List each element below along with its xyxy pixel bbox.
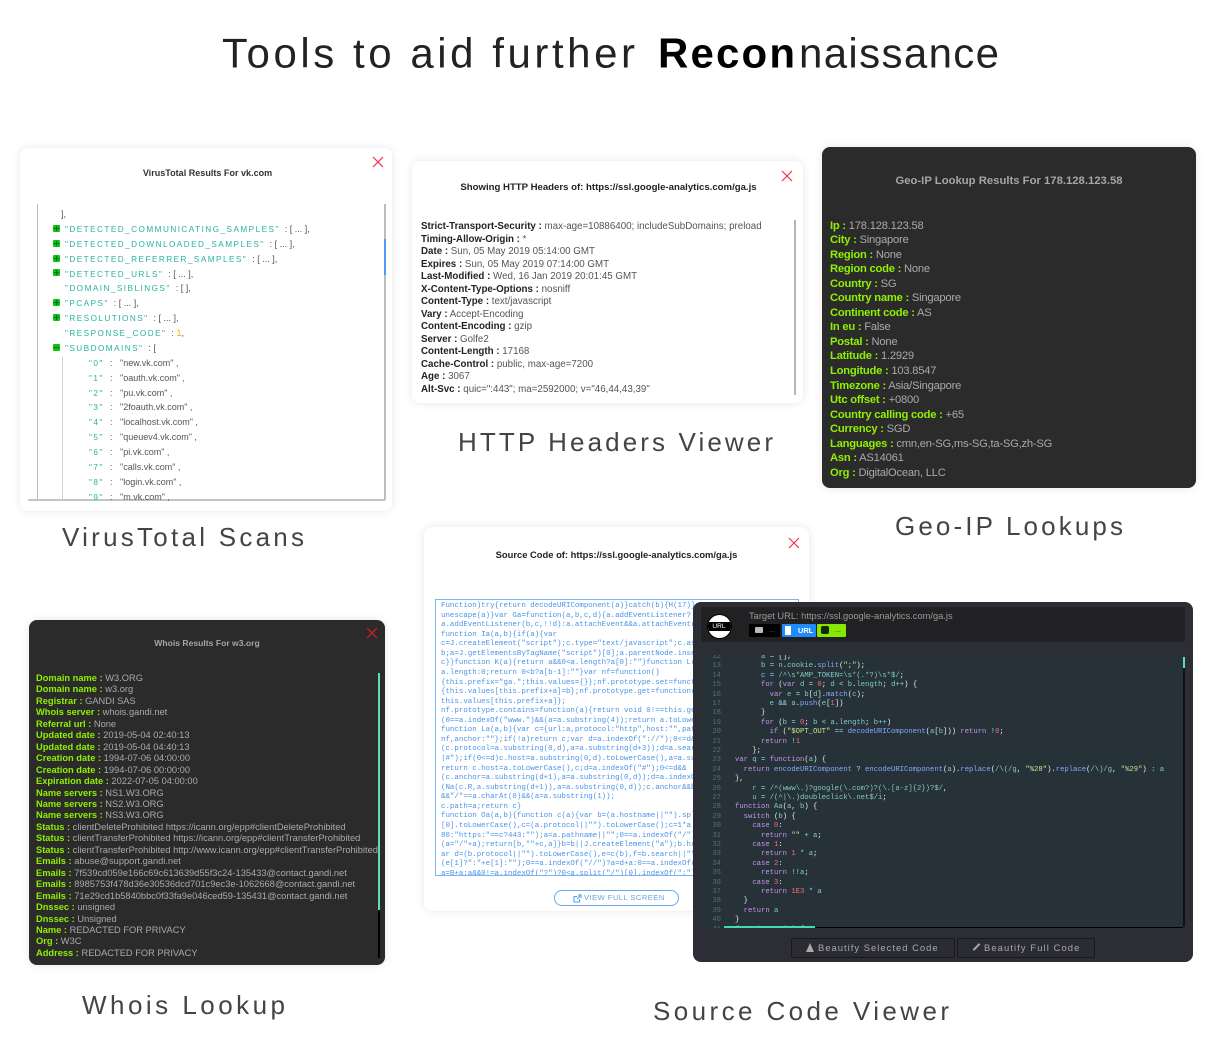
tag: URL: URL	[798, 626, 813, 635]
JSON tree viewer: "0"	[89, 359, 104, 368]
lookup fields: Languages : cmn,en-SG,ms-SG,ta-SG,zh-SG	[830, 438, 1052, 450]
JSON tree viewer: "DOMAIN_SIBLINGS" : [ ],	[65, 283, 191, 293]
JSON tree viewer: "5"	[89, 433, 104, 442]
title	[222, 30, 999, 76]
JSON tree viewer: "DETECTED_DOWNLOADED_SAMPLES" : [ ... ],	[65, 239, 295, 249]
whois fields: Creation date : 1994-07-06 00:00:00	[36, 765, 190, 775]
whois fields: Name servers : NS3.W3.ORG	[36, 810, 164, 820]
JSON tree viewer: "4"	[89, 418, 104, 427]
header list: Content-Length : 17168	[421, 346, 529, 357]
whois fields: Emails : 71e29cd1b5840bbc0f33fa9e046ced59-135431@contact.gandi.net	[36, 891, 347, 901]
icon: close	[782, 170, 792, 182]
button: beautify full	[957, 938, 1095, 958]
heading: VirusTotal results: VirusTotal Results For vk.com	[143, 168, 272, 178]
tag: green: ...	[835, 627, 841, 634]
scrollbar	[378, 673, 380, 958]
title: Recon	[658, 30, 795, 76]
whois fields: Status : clientTransferProhibited https://icann.org/epp#clientTransferProhibited	[36, 833, 360, 843]
JSON tree viewer: "1"	[89, 374, 104, 383]
caption: HTTP Headers Viewer: HTTP Headers Viewer	[458, 427, 773, 457]
JSON tree viewer: "login.vk.com" ,	[120, 477, 181, 487]
caption: Whois Lookup: Whois Lookup	[82, 990, 285, 1020]
whois fields: Creation date : 1994-07-06 04:00:00	[36, 753, 190, 763]
icon: close	[372, 156, 384, 168]
JSON tree viewer: "pi.vk.com" ,	[120, 447, 169, 457]
JSON tree viewer: "new.vk.com" ,	[120, 358, 178, 368]
whois fields: Status : clientDeleteProhibited https://icann.org/epp#clientDeleteProhibited	[36, 822, 346, 832]
whois fields: Name servers : NS1.W3.ORG	[36, 788, 164, 798]
lookup fields: Country calling code : +65	[830, 409, 964, 421]
header list: Timing-Allow-Origin : *	[421, 234, 526, 244]
icon: close	[788, 538, 800, 548]
whois fields: Whois server : whois.gandi.net	[36, 707, 167, 717]
code pane: a = []; b = n.cookie.split(";"); c = /^\s*AMP_TOKEN=\s*(.*?)\s*$/; for (var d = 0; d < b.length; d++) { var e = b[d].match(c); e && a.push(e[1]) } for (b = 0; b < a.length; b++) if ("$OPT_OUT" == decodeURIComponent(a[b])) return !0; return !1 }; var q = function(a) { return encodeURIComponent ? encodeURIComponent(a).replace(/\(/g, "%28").replace(/\)/g, "%29") : a }, r = /^(www\.)?google(\.com?)?(\.[a-z]{2})?$/, u = /(^|\.)doubleclick\.net$/i; function Aa(a, b) { switch (b) { case 0: return "" + a; case 1: return 1 * a; case 2: return !!a; case 3: return 1E3 * a } return a } function Ca(a) {	[735, 655, 1164, 928]
header list: Alt-Svc : quic=":443"; ma=2592000; v="46,44,43,39"	[421, 384, 650, 394]
lookup fields: Timezone : Asia/Singapore	[830, 380, 961, 392]
whois fields: Registrar : GANDI SAS	[36, 696, 136, 706]
title: naissance	[799, 30, 999, 76]
JSON tree viewer: "7"	[89, 463, 104, 472]
JSON tree viewer: :	[110, 417, 113, 427]
lookup fields: City : Singapore	[830, 234, 909, 246]
JSON tree viewer	[28, 204, 386, 501]
panel: HTTP headers	[412, 161, 803, 403]
header list: Cache-Control : public, max-age=7200	[421, 358, 593, 370]
JSON tree viewer: "pu.vk.com" ,	[120, 388, 172, 398]
JSON tree viewer: :	[110, 462, 113, 472]
lookup fields: Continent code : AS	[830, 307, 932, 319]
JSON tree viewer: "PCAPS" : [ ... ],	[65, 298, 139, 308]
JSON tree viewer: :	[110, 477, 113, 487]
heading: HTTP headers: Showing HTTP Headers of: https://ssl.google-analytics.com/ga.js	[460, 182, 757, 193]
header list: Server : Golfe2	[421, 334, 489, 344]
lookup fields: Postal : None	[830, 336, 897, 348]
whois fields: Org : W3C	[36, 936, 81, 946]
header list: Last-Modified : Wed, 16 Jan 2019 20:01:45 GMT	[421, 271, 637, 282]
lookup fields: Asn : AS14061	[830, 452, 904, 464]
whois fields: Domain name : w3.org	[36, 684, 133, 694]
panel: Whois lookup	[29, 620, 385, 965]
header list	[421, 221, 762, 394]
JSON tree viewer: "2"	[89, 388, 104, 398]
JSON tree viewer: "localhost.vk.com" ,	[120, 417, 198, 427]
whois fields: Address : REDACTED FOR PRIVACY	[36, 948, 198, 958]
whois fields: Dnssec : unsigned	[36, 902, 115, 912]
header list: Date : Sun, 05 May 2019 05:14:00 GMT	[421, 246, 595, 257]
JSON tree viewer: "DETECTED_REFERRER_SAMPLES" : [ ... ],	[65, 254, 277, 264]
button: beautify selected	[791, 938, 955, 958]
JSON tree viewer: "8"	[89, 478, 104, 487]
header list: Strict-Transport-Security : max-age=10886400; includeSubDomains; preload	[421, 221, 762, 232]
JSON tree viewer: :	[110, 432, 113, 442]
whois fields	[36, 673, 378, 958]
lookup fields	[830, 220, 1052, 479]
JSON tree viewer: ],	[61, 209, 66, 219]
JSON tree viewer: "3"	[89, 403, 104, 412]
whois fields: Emails : abuse@support.gandi.net	[36, 856, 181, 866]
JSON tree viewer: "oauth.vk.com" ,	[120, 373, 185, 383]
JSON tree viewer: "DETECTED_URLS" : [ ... ],	[65, 268, 193, 278]
header list: Vary : Accept-Encoding	[421, 308, 523, 320]
header list: X-Content-Type-Options : nosniff	[421, 284, 570, 294]
whois fields: Name servers : NS2.W3.ORG	[36, 799, 164, 809]
icon: URL badge: URL	[712, 623, 726, 630]
heading: source code: Source Code of: https://ssl.google-analytics.com/ga.js	[496, 549, 737, 560]
header list: Expires : Sun, 05 May 2019 07:14:00 GMT	[421, 258, 609, 270]
lookup fields: Country name : Singapore	[830, 292, 961, 304]
lookup fields: Longitude : 103.8547	[830, 365, 936, 377]
whois fields: Name : REDACTED FOR PRIVACY	[36, 925, 186, 935]
toolbar	[701, 607, 1185, 642]
icon: close	[366, 628, 378, 638]
whois fields: Dnssec : Unsigned	[36, 914, 117, 924]
JSON tree viewer: "calls.vk.com" ,	[120, 462, 180, 472]
whois fields: Status : clientTransferProhibited http://www.icann.org/epp#clientTransferProhibited	[36, 845, 378, 855]
lookup fields: Ip : 178.128.123.58	[830, 220, 923, 232]
JSON tree viewer: :	[110, 447, 113, 457]
header list: Age : 3067	[421, 371, 470, 382]
header list: Content-Encoding : gzip	[421, 321, 532, 332]
lookup fields: In eu : False	[830, 321, 891, 333]
caption: Geo-IP Lookups: Geo-IP Lookups	[895, 511, 1123, 541]
JSON tree viewer: :	[110, 402, 113, 412]
vertical scrollbar	[1183, 657, 1185, 927]
whois fields: Domain name : W3.ORG	[36, 673, 143, 683]
caption: Source Code Viewer: Source Code Viewer	[653, 996, 949, 1026]
lookup fields: Region : None	[830, 249, 902, 261]
minified code box: Function)try{return decodeURIComponent(a)}catch(b){H(17)}return unescape(a)}var Ga=function(a,b,c,d){a.addEventListener? a.addEventListener(b,c,!!d):a.attachEvent&&a.attachEvent("on"+b,c)}, function Ia(a,b){if(a){var c=J.createElement("script");c.type="text/javascript";c.async=!0;c.src=a; b;a=J.getElementsByTagName("script")[0];a.parentNode.insertBefore(c,a); c}}function K(a){return a&&0<a.length?a[0]:""}function L(a){var b=a? a.length:0;return 0<b?a[b-1]:""}var nf=function() {this.prefix="ga.";this.values={}};nf.prototype.set=function(a,b) {this.values[this.prefix+a]=b};nf.prototype.get=function(a){return this.values[this.prefix+a]}; nf.prototype.contains=function(a){return void 0!==this.get(a)}; (0==a.indexOf("www.")&&(a=a.substring(4));return a.toLowerCase()} function La(a,b){var c={url:a,protocol:"http",host:"",path:"",R:new nf,anchor:""};if(!a)return c;var d=a.indexOf("://");0<=d&& (c.protocol=a.substring(0,d),a=a.substring(d+3));d=a.search("/|\? |#");if(0<=d)c.host=a.substring(0,d).toLowerCase(),a=a.substring(d);else return c.host=a.toLowerCase(),c;d=a.indexOf("#");0<=d&& (c.anchor=a.substring(d+1),a=a.substring(0,d));d=a.indexOf("?");0<=d&& (Na(c.R,a.substring(d+1)),a=a.substring(0,d));c.anchor&&b&& &&"/"==a.charAt(0)&&(a=a.substring(1)); c.path=a;return c} function Oa(a,b){function c(a){var b=(a.hostname||"").split(":") [0].toLowerCase(),c=(a.protocol||"").toLowerCase();c=1*a.port||("http:"==c? 80:"https:"==c?443:"");a=a.pathname||"";0==a.indexOf("/")|| (a="/"+a);return[b,""+c,a]}b=b||J.createElement("a");b.href=J.location.href;v ar d=(b.protocol||"").toLowerCase(),e=c(b),f=b.search||"",k=d+"//"+e[0]+ (e[1]?":"+e[1]:"");0==a.indexOf("//")?a=d+a:0==a.indexOf("/")?a=k+a: a=B+a:a&&0!=a.indexOf("?")?0<a.split("/")[0].indexOf(":")||	[441, 602, 785, 876]
JSON tree viewer: "6"	[89, 448, 104, 457]
whois fields: Emails : 8985753f478d36e30536dcd701c9ec3e-1062668@contact.gandi.net	[36, 879, 355, 889]
tag: URL	[782, 624, 816, 637]
lookup fields: Region code : None	[830, 263, 930, 275]
tag: folder: ...	[769, 627, 775, 634]
JSON tree viewer: "DETECTED_COMMUNICATING_SAMPLES" : [ ... ],	[65, 224, 310, 234]
lookup fields: Latitude : 1.2929	[830, 350, 914, 362]
button: beautify selected: Beautify Selected Code	[818, 942, 939, 953]
JSON tree viewer: "RESPONSE_CODE" : 1,	[65, 328, 184, 338]
icon: URL badge	[707, 614, 732, 639]
header list: Content-Type : text/javascript	[421, 296, 551, 307]
panel: VirusTotal results	[20, 148, 392, 511]
button: beautify full: Beautify Full Code	[984, 942, 1080, 953]
JSON tree viewer: "2foauth.vk.com" ,	[120, 402, 192, 412]
title: Tools to aid further	[222, 30, 635, 76]
heading: Whois lookup: Whois Results For w3.org	[154, 638, 260, 648]
JSON tree viewer: :	[110, 373, 113, 383]
whois fields: Updated date : 2019-05-04 02:40:13	[36, 730, 190, 740]
JSON tree viewer: "RESOLUTIONS" : [ ... ],	[65, 313, 178, 323]
whois fields: Expiration date : 2022-07-05 04:00:00	[36, 776, 198, 786]
button: view full screen: VIEW FULL SCREEN	[584, 893, 665, 902]
target URL: Target URL: https://ssl.google-analytics.com/ga.js	[749, 611, 953, 621]
JSON tree viewer: :	[110, 388, 113, 398]
panel: Geo-IP lookup	[822, 147, 1196, 488]
whois fields: Updated date : 2019-05-04 04:40:13	[36, 742, 190, 752]
lookup fields: Org : DigitalOcean, LLC	[830, 467, 946, 479]
whois fields: Referral url : None	[36, 719, 116, 729]
heading: Geo-IP lookup: Geo-IP Lookup Results For 178.128.123.58	[895, 175, 1123, 187]
panel: source code	[424, 527, 809, 911]
tag: green	[817, 624, 846, 637]
lookup fields: Currency : SGD	[830, 423, 910, 435]
lookup fields: Country : SG	[830, 278, 896, 290]
tag: folder	[749, 624, 780, 637]
code pane: 12 13 14 15 16 17 18 19 20 21 22 23 24 25 26 27 28 29 30 31 32 33 34 35 36 37 38 39 40 41	[712, 655, 721, 928]
JSON tree viewer: :	[110, 358, 113, 368]
JSON tree viewer: "SUBDOMAINS" : [	[65, 343, 156, 353]
caption: VirusTotal Scans: VirusTotal Scans	[62, 522, 304, 552]
whois fields: Emails : 7f539cd059e166c69c613639d55f3c24-135433@contact.gandi.net	[36, 868, 347, 878]
panel: code editor window	[693, 602, 1193, 962]
button: view full screen	[554, 890, 679, 906]
lookup fields: Utc offset : +0800	[830, 394, 919, 406]
JSON tree viewer: "queuev4.vk.com" ,	[120, 432, 197, 442]
